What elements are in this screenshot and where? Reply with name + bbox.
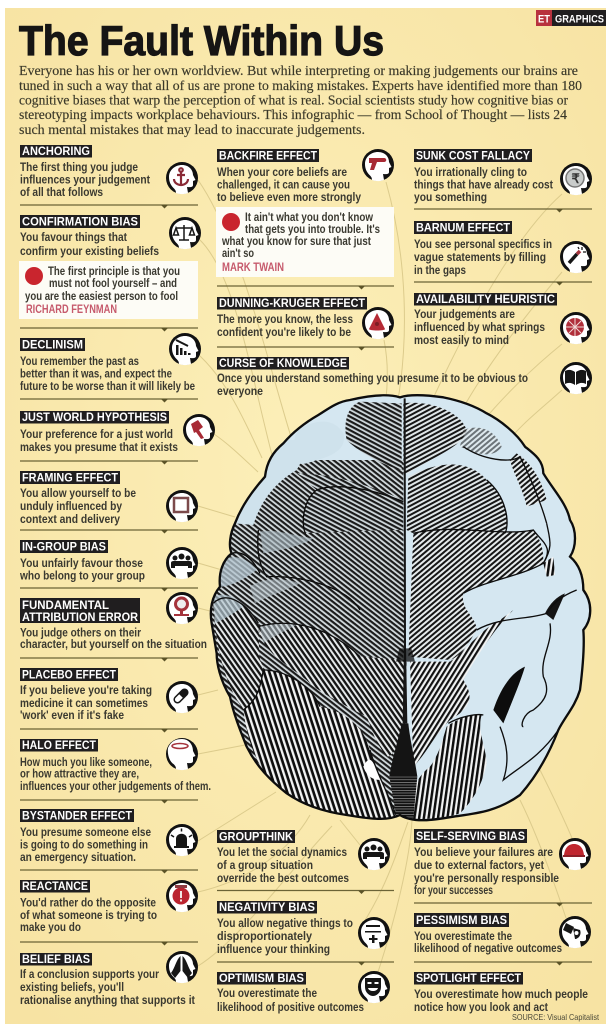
- text block: makes you presume that it exists: [20, 440, 178, 454]
- quote text: that gets you into trouble. It's: [245, 222, 380, 236]
- text block: who belong to your group: [19, 568, 145, 582]
- text block: better than it was, and expect the: [20, 366, 172, 380]
- text block: [20, 486, 136, 526]
- heading: ANCHORING: [22, 144, 90, 158]
- quote text: ain't so: [222, 246, 254, 260]
- panel: halo effect: [20, 738, 211, 793]
- divider: [20, 588, 198, 592]
- heading: SUNK COST FALLACY: [416, 148, 530, 162]
- text block: You judge others on their: [20, 626, 141, 640]
- text block: everyone: [217, 384, 263, 398]
- heading: OPTIMISM BIAS: [219, 971, 304, 985]
- icon: alarm light: [166, 824, 198, 856]
- heading: BYSTANDER EFFECT: [22, 808, 133, 822]
- text block: [20, 967, 195, 1007]
- divider: [414, 903, 592, 906]
- heading: [20, 598, 140, 624]
- text block: You irrationally cling to: [414, 165, 527, 179]
- quote text: [25, 264, 180, 303]
- text block: challenged, it can cause you: [217, 178, 350, 192]
- text block: [217, 312, 353, 339]
- text block: most easily to mind: [414, 333, 509, 347]
- icon: red flower: [560, 312, 592, 344]
- divider: [414, 209, 592, 212]
- text block: of what someone is trying to: [20, 908, 157, 922]
- quote text: you are the easiest person to fool: [25, 289, 178, 303]
- text block: [414, 307, 545, 347]
- text block: things that have already cost: [414, 178, 553, 192]
- heading: AVAILABILITY HEURISTIC: [416, 292, 555, 306]
- text block: [217, 165, 361, 204]
- panel: reactance: [20, 879, 198, 934]
- panel: curse of knowledge: [217, 356, 592, 398]
- quote text: [221, 210, 380, 260]
- divider: [20, 399, 198, 402]
- heading: CURSE OF KNOWLEDGE: [219, 356, 347, 370]
- text block: is going to do something in: [20, 838, 148, 852]
- connector lines from icons to brain: [198, 180, 572, 972]
- panel: just world hypothesis: [20, 410, 215, 454]
- heading: BACKFIRE EFFECT: [219, 148, 318, 162]
- text block: [20, 825, 151, 864]
- divider: [20, 658, 198, 662]
- text block: [20, 160, 150, 199]
- divider: [20, 461, 198, 464]
- heading: PESSIMISM BIAS: [416, 913, 507, 927]
- text block: [19, 556, 145, 582]
- text block: unduly influenced by: [20, 499, 122, 513]
- divider: [20, 530, 198, 534]
- text block: existing beliefs, you'll: [20, 980, 124, 994]
- text block: influence your thinking: [217, 942, 330, 956]
- icon: plus and minus: [358, 917, 390, 949]
- text block: 'work' even if it's fake: [20, 708, 124, 722]
- icon: group of people: [166, 547, 198, 579]
- text block: [20, 755, 211, 793]
- divider: [217, 286, 394, 290]
- divider: [20, 205, 198, 208]
- text block: an emergency situation.: [20, 850, 136, 864]
- text block: You let the social dynamics: [217, 845, 347, 859]
- text block: [20, 427, 178, 454]
- divider: [20, 328, 198, 332]
- heading: DECLINISM: [22, 338, 83, 352]
- text block: [414, 165, 553, 204]
- text block: Your judgements are: [414, 307, 515, 321]
- panel: fundamental attribution error: [20, 592, 207, 651]
- heading: IN-GROUP BIAS: [22, 540, 106, 554]
- text block: rationalise anything that supports it: [20, 993, 195, 1007]
- icon: theatre mask: [358, 971, 390, 1003]
- icon: red triangle: [362, 307, 394, 339]
- icon: magic wand: [560, 241, 592, 273]
- panel: declinism: [20, 333, 201, 393]
- text block: influences your other judgements of them.: [20, 779, 211, 793]
- text block: vague statements by filling: [414, 250, 546, 264]
- text block: You favour things that: [20, 230, 127, 244]
- text block: of all that follows: [20, 185, 103, 199]
- panel: pessimism bias: [414, 913, 591, 955]
- panel: sunk cost fallacy: [414, 148, 592, 204]
- text block: for your successes: [414, 883, 493, 897]
- panel: self-serving bias: [414, 829, 591, 897]
- text block: to believe even more strongly: [217, 190, 361, 204]
- intro text block: [19, 63, 582, 137]
- title: The Fault Within Us: [19, 17, 384, 64]
- text block: You allow negative things to: [217, 916, 353, 930]
- text block: The first thing you judge: [20, 160, 138, 174]
- intro text block: such mental mistakes that may lead to inaccurate judgements.: [19, 122, 365, 137]
- text block: [217, 986, 364, 1014]
- heading: FRAMING EFFECT: [22, 470, 119, 484]
- divider: [20, 729, 198, 732]
- attribution: MARK TWAIN: [222, 260, 284, 274]
- text block: Your preference for a just world: [20, 427, 173, 441]
- text block: You overestimate the: [414, 929, 512, 943]
- panel: optimism bias: [217, 971, 390, 1014]
- icon: red dome: [559, 838, 591, 870]
- heading: FUNDAMENTAL: [22, 598, 109, 612]
- text block: [20, 896, 157, 934]
- callout: Mark Twain quote: [216, 207, 394, 277]
- badge: ET Graphics: GRAPHICS: [555, 14, 604, 26]
- icon: red quote mark: [25, 267, 43, 285]
- icon: pistol: [362, 149, 394, 181]
- panel: availability heuristic: [414, 292, 592, 347]
- panel: bystander effect: [20, 808, 198, 864]
- quote text: It ain't what you don't know: [245, 210, 374, 224]
- heading: DUNNING-KRUGER EFFECT: [219, 296, 366, 310]
- intro text block: Everyone has his or her own worldview. But while interpreting or making judgements our brains are: [19, 63, 578, 78]
- text block: due to external factors, yet: [414, 858, 544, 872]
- text block: or how attractive they are,: [20, 766, 139, 780]
- heading: JUST WORLD HYPOTHESIS: [22, 410, 167, 424]
- icon: pill: [166, 681, 198, 713]
- icon: falling chart: [169, 333, 201, 365]
- text block: You allow yourself to be: [20, 486, 136, 500]
- text block: likelihood of positive outcomes: [217, 1000, 364, 1014]
- text block: How much you like someone,: [20, 755, 152, 769]
- panel: placebo effect: [20, 668, 198, 722]
- text block: [20, 626, 207, 651]
- text block: [414, 929, 562, 955]
- icon: anchor: [166, 162, 198, 194]
- heading: PLACEBO EFFECT: [22, 668, 117, 682]
- text block: [217, 845, 349, 885]
- text block: notice how you look and act: [414, 1000, 548, 1014]
- quote text: The first principle is that you: [48, 264, 180, 278]
- text block: If a conclusion supports your: [20, 967, 159, 981]
- heading: SELF-SERVING BIAS: [416, 829, 525, 843]
- text block: medicine it can sometimes: [20, 696, 148, 710]
- quote text: what you know for sure that just: [221, 234, 371, 248]
- text block: You unfairly favour those: [20, 556, 143, 570]
- panel: anchoring: [20, 144, 198, 199]
- badge: ET Graphics: ET: [538, 14, 550, 26]
- brain illustration: [200, 390, 600, 830]
- icon: red quote mark: [222, 213, 240, 231]
- divider: [217, 347, 394, 350]
- text block: influences your judgement: [20, 172, 150, 186]
- attribution: RICHARD FEYNMAN: [26, 302, 117, 316]
- divider: [20, 800, 198, 804]
- text block: influenced by what springs: [414, 320, 545, 334]
- text block: confirm your existing beliefs: [20, 244, 159, 258]
- divider: [217, 962, 394, 966]
- heading: BARNUM EFFECT: [416, 220, 511, 234]
- text block: [217, 916, 353, 956]
- source credit: SOURCE: Visual Capitalist: [512, 1012, 600, 1022]
- text block: future to be worse than it will likely be: [20, 379, 195, 393]
- text block: of a group situation: [217, 858, 313, 872]
- text block: [414, 237, 552, 277]
- intro text block: stereotyping impacts workplace behaviours. This infographic — from School of Thought — lists 24: [19, 107, 567, 122]
- text block: override the best outcomes: [217, 871, 349, 885]
- heading: REACTANCE: [22, 879, 88, 893]
- divider: [217, 890, 394, 894]
- text block: context and delivery: [20, 512, 120, 526]
- text block: [20, 354, 195, 393]
- text block: You see personal specifics in: [414, 237, 552, 251]
- text block: make you do: [20, 920, 81, 934]
- icon: scales: [169, 217, 201, 249]
- text block: likelihood of negative outcomes: [414, 941, 562, 955]
- text block: disproportionately: [217, 929, 312, 943]
- panel: in-group bias: [19, 540, 198, 582]
- badge: ET Graphics: [536, 10, 606, 26]
- panel: spotlight effect: [414, 971, 588, 1014]
- heading: NEGATIVITY BIAS: [219, 900, 315, 914]
- intro text block: tuned in such a way that all of us are prone to making mistakes. Experts have identified more than 180: [19, 78, 582, 93]
- quote text: must not fool yourself – and: [49, 276, 177, 290]
- panel: groupthink: [217, 830, 390, 885]
- text block: [414, 987, 588, 1014]
- panel: framing effect: [20, 470, 198, 526]
- panel: belief bias: [20, 951, 198, 1007]
- text block: [20, 230, 159, 258]
- text block: You presume someone else: [20, 825, 151, 839]
- text block: You overestimate how much people: [414, 987, 588, 1001]
- icon: praying hands: [166, 951, 198, 983]
- text block: You believe your failures are: [414, 845, 553, 859]
- text block: The more you know, the less: [217, 312, 353, 326]
- text block: in the gaps: [414, 263, 466, 277]
- heading: BELIEF BIAS: [22, 952, 90, 966]
- heading: GROUPTHINK: [219, 830, 293, 844]
- divider: [20, 942, 198, 946]
- icon: rupee coin: ₹: [572, 171, 580, 186]
- text block: Once you understand something you presume it to be obvious to: [217, 371, 528, 385]
- icon: person on podium: [166, 592, 198, 624]
- text block: If you believe you're taking: [20, 683, 152, 697]
- icon: spotlight: [559, 916, 591, 948]
- icon: gavel: [183, 414, 215, 446]
- divider: [414, 282, 592, 286]
- icon: group of people: [358, 838, 390, 870]
- text block: When your core beliefs are: [217, 165, 347, 179]
- text block: You'd rather do the opposite: [20, 896, 156, 910]
- panel: dunning-kruger effect: [217, 296, 394, 339]
- text block: confident you're likely to be: [217, 325, 351, 339]
- callout: Richard Feynman quote: [19, 261, 198, 319]
- text block: You overestimate the: [217, 986, 317, 1000]
- divider: [20, 870, 198, 874]
- icon: halo: [166, 738, 198, 770]
- heading: SPOTLIGHT EFFECT: [416, 971, 522, 985]
- panel: negativity bias: [217, 900, 390, 956]
- icon: red alert: [166, 880, 198, 912]
- panel: confirmation bias: [20, 214, 201, 258]
- intro text block: cognitive biases that warp the perception of what is real. Social scientists study how cognitive bias or: [19, 92, 568, 108]
- heading: ATTRIBUTION ERROR: [22, 610, 138, 624]
- panel: backfire effect: [217, 148, 394, 204]
- text block: [414, 845, 559, 897]
- heading: HALO EFFECT: [22, 738, 97, 752]
- icon: frame: [166, 490, 198, 522]
- text block: [217, 371, 528, 398]
- icon: open book: [560, 362, 592, 394]
- text block: [20, 683, 152, 722]
- text block: character, but yourself on the situation: [20, 637, 207, 651]
- icon: rupee coin: [560, 163, 592, 195]
- panel: barnum effect: [414, 220, 592, 277]
- text block: you something: [414, 190, 487, 204]
- text block: you're personally responsible: [414, 871, 559, 885]
- text block: You remember the past as: [20, 354, 139, 368]
- divider: [414, 962, 592, 966]
- heading: CONFIRMATION BIAS: [22, 214, 138, 228]
